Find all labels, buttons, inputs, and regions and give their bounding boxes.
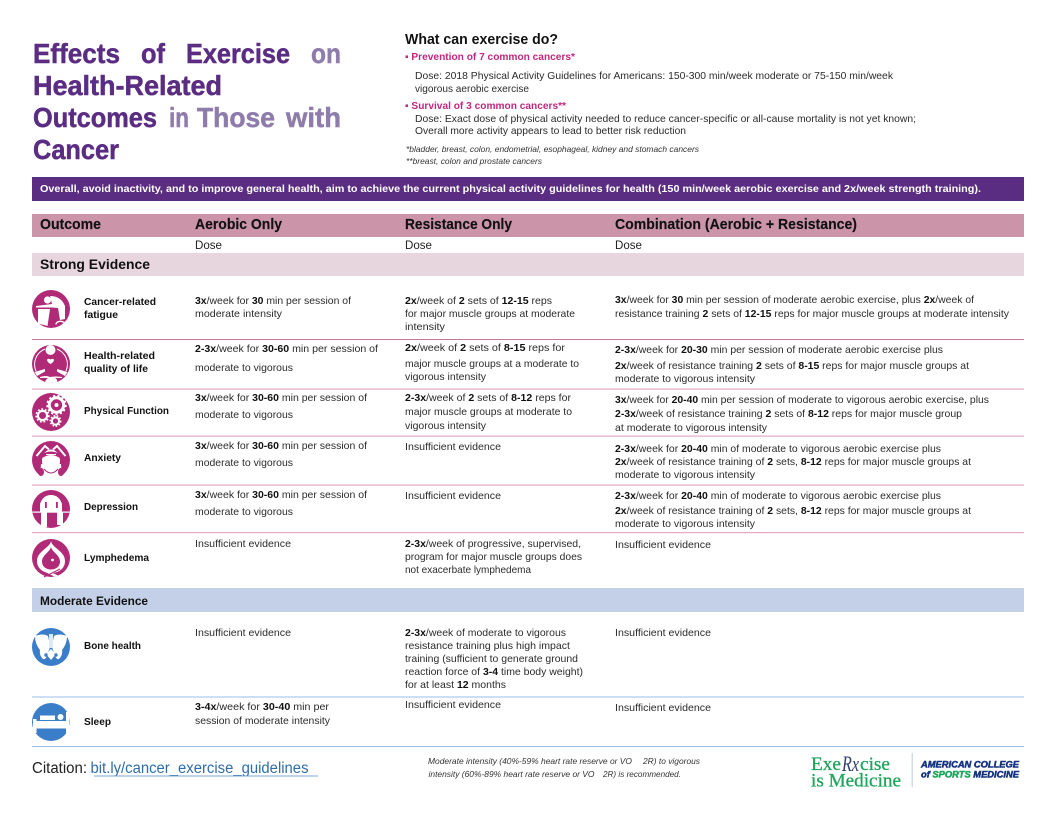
prevention dose: vigorous aerobic exercise: [415, 83, 529, 95]
survival heading: ▪ Survival of 3 common cancers**: [405, 100, 567, 112]
table header: Outcome: [40, 216, 101, 233]
logo: American College of Sports Medicine: of SPORTS MEDICINE: [921, 770, 1020, 780]
combination dose: [615, 344, 969, 385]
aerobic dose: [195, 701, 331, 727]
title: with: [285, 102, 341, 133]
resistance dose: [405, 392, 572, 432]
resistance dose: not exacerbate lymphedema: [405, 564, 531, 576]
outcome label: fatigue: [84, 309, 118, 321]
combination dose: Insufficient evidence: [615, 702, 711, 714]
aerobic dose: moderate intensity: [195, 308, 283, 320]
title: Those: [197, 102, 275, 133]
resistance dose: [405, 538, 582, 576]
resistance dose: intensity: [405, 321, 446, 333]
moderate evidence band: [32, 588, 1024, 612]
resistance dose: 2-3x/week of moderate to vigorous: [405, 627, 566, 639]
heading: what can exercise do: What can exercise do?: [405, 31, 558, 48]
resistance dose: major muscle groups at a moderate to: [405, 358, 579, 370]
resistance dose: [405, 295, 575, 333]
resistance dose: [405, 342, 579, 383]
outcome label: Health-related: [84, 350, 155, 362]
logo: Exercise is Medicine: [811, 751, 901, 792]
strong evidence band: Strong Evidence: [40, 256, 150, 272]
row: anxiety: [32, 440, 971, 481]
icon: bed: [32, 703, 70, 741]
aerobic dose: [195, 440, 367, 469]
dose sub-headers: Dose: [405, 240, 432, 252]
title: Cancer: [33, 134, 119, 165]
row: health-related quality of life: [32, 342, 969, 385]
dose sub-headers: [195, 240, 642, 252]
combination dose: [615, 394, 989, 434]
logo: Exercise is Medicine: Rx: [841, 751, 859, 776]
icon: person slumped at desk: [32, 290, 70, 328]
title: [33, 38, 341, 165]
combination dose: 2x/week of resistance training of 2 sets, 8-12 reps for major muscle groups at: [615, 456, 971, 468]
combination dose: moderate to vigorous intensity: [615, 469, 756, 481]
banner: overall guidance: Overall, avoid inactivity, and to improve general health, aim to achieve the current physical activity guidelines for health (150 min/week aerobic exercise and 2x/week strength training).: [40, 183, 981, 195]
icon: slumped figure at table: [32, 490, 70, 528]
aerobic dose: Insufficient evidence: [195, 538, 291, 550]
dose sub-headers: Dose: [195, 240, 222, 252]
intensity footnote: intensity (60%-89% heart rate reserve or VO: [428, 769, 595, 779]
title: Exercise: [186, 38, 290, 69]
logo: Exercise is Medicine: Exe: [811, 755, 841, 775]
cancer footnotes: *bladder, breast, colon, endometrial, esophageal, kidney and stomach cancers: [406, 144, 700, 154]
intensity footnote: 2R) is recommended.: [602, 769, 681, 779]
resistance dose: major muscle groups at moderate to: [405, 406, 572, 418]
aerobic dose: session of moderate intensity: [195, 715, 331, 727]
title: in: [169, 102, 189, 133]
aerobic dose: moderate to vigorous: [195, 457, 293, 469]
outcome label: Depression: [84, 501, 138, 513]
table header: [32, 214, 1024, 237]
resistance dose: Insufficient evidence: [405, 490, 501, 502]
resistance dose: for at least 12 months: [405, 679, 506, 691]
table header: Aerobic Only: [195, 216, 283, 233]
resistance dose: 2-3x/week of 2 sets of 8-12 reps for: [405, 392, 572, 404]
outcome label: Lymphedema: [84, 552, 149, 564]
icon: gears: [32, 393, 70, 431]
outcome label: Sleep: [84, 716, 111, 728]
aerobic dose: moderate to vigorous: [195, 362, 293, 374]
combination dose: 3x/week for 20-40 min per session of moderate to vigorous aerobic exercise, plus: [615, 394, 989, 406]
aerobic dose: moderate to vigorous: [195, 506, 293, 518]
citation: bit.ly/cancer_exercise_guidelines: [90, 760, 309, 777]
resistance dose: [405, 627, 583, 691]
combination dose: moderate to vigorous intensity: [615, 373, 756, 385]
resistance dose: 2x/week of 2 sets of 8-15 reps for: [405, 342, 566, 354]
icon: anxious head held by hands: [32, 441, 70, 480]
resistance dose: vigorous intensity: [405, 420, 487, 432]
moderate evidence band: Moderate Evidence: [40, 594, 148, 608]
aerobic dose: 3x/week for 30 min per session of: [195, 295, 351, 307]
title: on: [311, 38, 341, 69]
banner: overall guidance: [32, 177, 1024, 201]
aerobic dose: 3x/week for 30-60 min per session of: [195, 392, 367, 404]
table header: Combination (Aerobic + Resistance): [615, 216, 857, 233]
prevention dose: [415, 70, 894, 95]
combination dose: at moderate to vigorous intensity: [615, 422, 768, 434]
combination dose: 2-3x/week for 20-40 min of moderate to vigorous aerobic exercise plus: [615, 443, 941, 455]
resistance dose: Insufficient evidence: [405, 441, 501, 453]
combination dose: [615, 490, 971, 530]
aerobic dose: moderate to vigorous: [195, 409, 293, 421]
combination dose: resistance training 2 sets of 12-15 reps for major muscle groups at moderate intensity: [615, 308, 1010, 320]
resistance dose: Insufficient evidence: [405, 699, 501, 711]
outcome label: [84, 296, 156, 321]
title: Outcomes: [33, 102, 157, 133]
aerobic dose: [195, 392, 367, 421]
resistance dose: training (sufficient to generate ground: [405, 653, 578, 665]
survival dose: Dose: Exact dose of physical activity needed to reduce cancer-specific or all-cause mortality is not yet known;: [415, 113, 916, 125]
aerobic dose: [195, 343, 378, 374]
logo: Exercise is Medicine: is Medicine: [811, 772, 901, 792]
combination dose: 2-3x/week for 20-30 min per session of moderate aerobic exercise plus: [615, 344, 943, 356]
combination dose: [615, 294, 1010, 320]
icon: pelvis: [32, 628, 70, 666]
logo: American College of Sports Medicine: AMERICAN COLLEGE: [920, 760, 1020, 770]
outcome label: [84, 350, 155, 375]
logo: Exercise is Medicine: cise: [860, 755, 890, 775]
survival dose: [415, 113, 916, 137]
table header: Resistance Only: [405, 216, 513, 233]
title: of: [141, 38, 166, 69]
aerobic dose: 3x/week for 30-60 min per session of: [195, 489, 367, 501]
cancer footnotes: **breast, colon and prostate cancers: [406, 156, 543, 166]
combination dose: 3x/week for 30 min per session of moderate aerobic exercise, plus 2x/week of: [615, 294, 974, 306]
combination dose: 2x/week of resistance training 2 sets of 8-15 reps for major muscle groups at: [615, 360, 969, 372]
aerobic dose: 2-3x/week for 30-60 min per session of: [195, 343, 378, 355]
aerobic dose: 3-4x/week for 30-40 min per: [195, 701, 330, 713]
icon: lymph drop ribbon: [32, 539, 70, 577]
strong evidence band: [32, 253, 1024, 276]
combination dose: moderate to vigorous intensity: [615, 518, 756, 530]
cancer footnotes: [406, 144, 700, 166]
outcome label: Physical Function: [84, 405, 169, 417]
icon: meditating figure with heart: [32, 345, 70, 383]
citation: Citation:: [32, 760, 87, 777]
title: Health-Related: [33, 70, 222, 101]
row: physical function: [32, 392, 989, 434]
intensity footnote: Moderate intensity (40%-59% heart rate reserve or VO: [428, 756, 632, 766]
combination dose: 2-3x/week of resistance training 2 sets of 8-12 reps for major muscle group: [615, 408, 962, 420]
resistance dose: for major muscle groups at moderate: [405, 308, 575, 320]
resistance dose: resistance training plus high impact: [405, 640, 570, 652]
outcome label: Bone health: [84, 640, 141, 652]
prevention heading: ▪ Prevention of 7 common cancers*: [405, 51, 576, 63]
combination dose: [615, 443, 971, 481]
logo: American College of Sports Medicine: [920, 760, 1020, 780]
title: Effects: [33, 38, 120, 69]
prevention dose: Dose: 2018 Physical Activity Guidelines for Americans: 150-300 min/week moderate or 75-150 min/week: [415, 70, 894, 82]
row: cancer-related fatigue: [32, 290, 1010, 333]
intensity footnote: [428, 756, 701, 779]
row: bone health: [32, 627, 711, 691]
resistance dose: vigorous intensity: [405, 371, 487, 383]
outcome label: Cancer-related: [84, 296, 156, 308]
row: lymphedema: [32, 538, 711, 577]
combination dose: 2x/week of resistance training of 2 sets, 8-12 reps for major muscle groups at: [615, 505, 971, 517]
aerobic dose: Insufficient evidence: [195, 627, 291, 639]
combination dose: Insufficient evidence: [615, 627, 711, 639]
aerobic dose: [195, 489, 367, 518]
aerobic dose: [195, 295, 351, 320]
combination dose: Insufficient evidence: [615, 539, 711, 551]
resistance dose: 2x/week of 2 sets of 12-15 reps: [405, 295, 552, 307]
row: depression: [32, 489, 971, 530]
aerobic dose: 3x/week for 30-60 min per session of: [195, 440, 367, 452]
resistance dose: program for major muscle groups does: [405, 551, 582, 563]
resistance dose: 2-3x/week of progressive, supervised,: [405, 538, 581, 550]
combination dose: 2-3x/week for 20-40 min of moderate to vigorous aerobic exercise plus: [615, 490, 941, 502]
survival dose: Overall more activity appears to lead to better risk reduction: [415, 125, 686, 137]
dose sub-headers: Dose: [615, 240, 642, 252]
row: sleep: [32, 699, 711, 741]
intensity footnote: 2R) to vigorous: [642, 756, 701, 766]
outcome label: quality of life: [84, 363, 148, 375]
resistance dose: reaction force of 3-4 time body weight): [405, 666, 583, 678]
outcome label: Anxiety: [84, 452, 121, 464]
panel: what can exercise do: [405, 31, 916, 166]
